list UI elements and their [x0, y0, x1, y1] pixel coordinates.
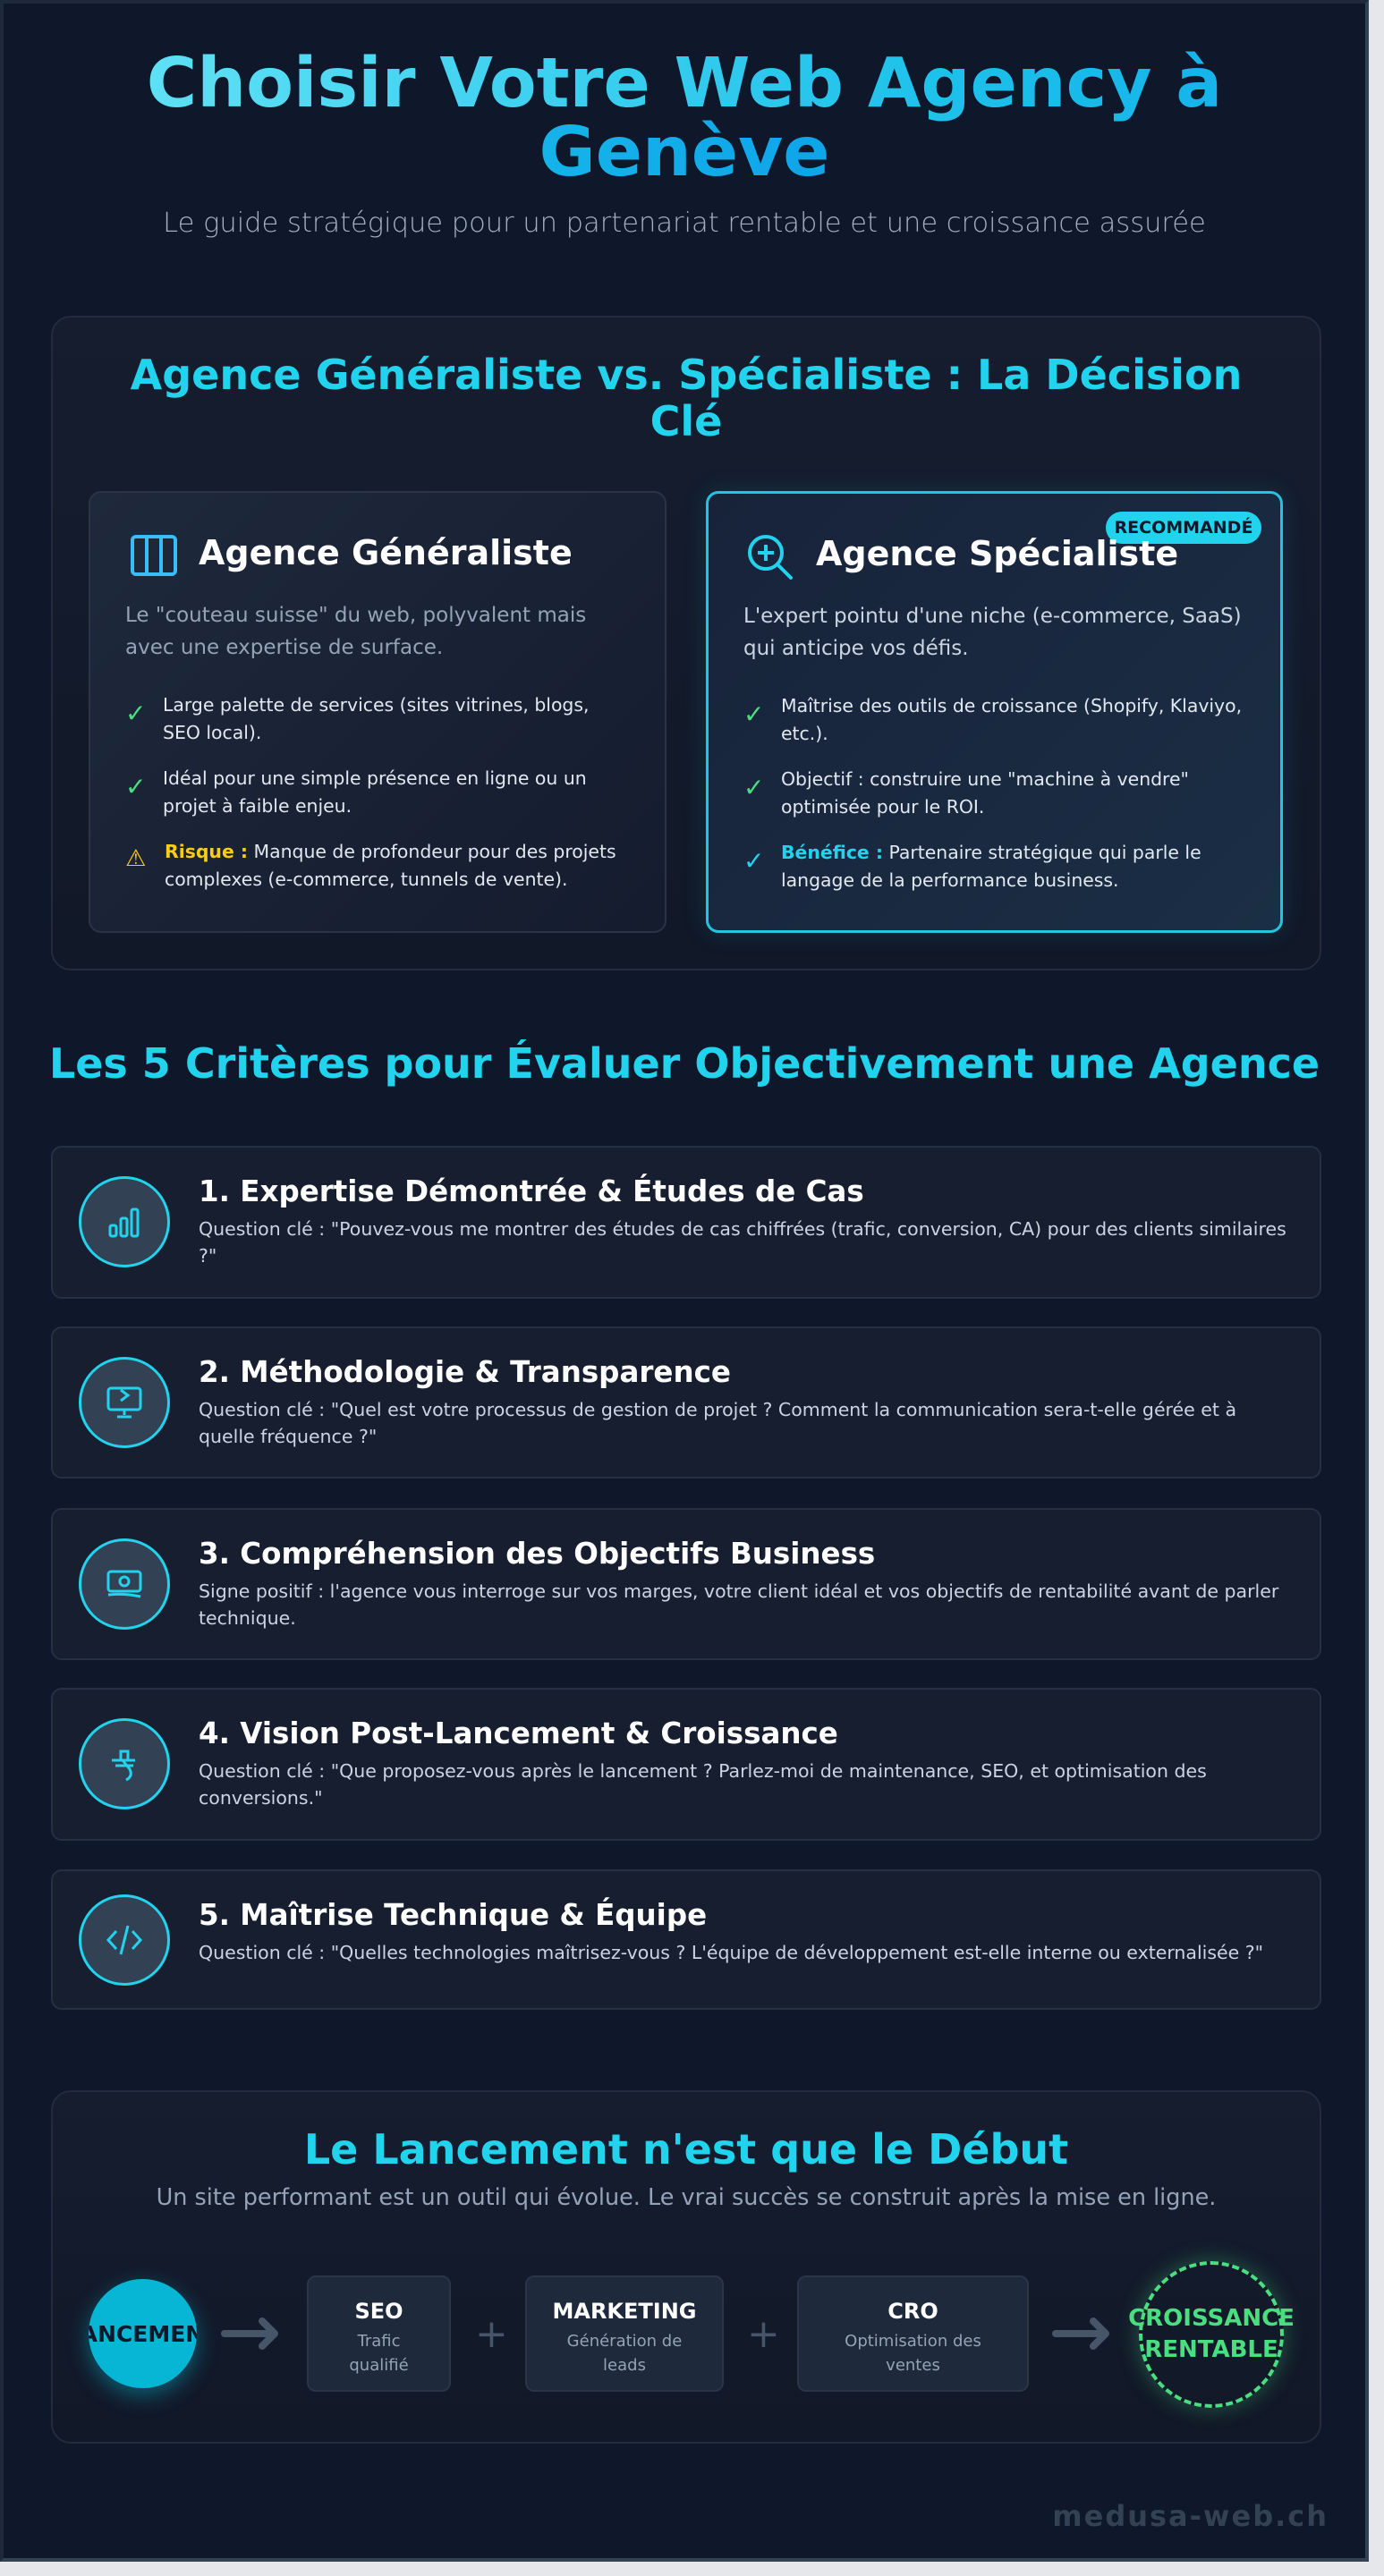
- panel heading: Agence Généraliste vs. Spécialiste : La Décision: [131, 351, 1242, 399]
- plus: +: [747, 2311, 780, 2357]
- icon: bar chart: [79, 1176, 170, 1267]
- circle: croissance rentable: CROISSANCE: [1128, 2305, 1295, 2332]
- criterion 2: Question clé : "Quel est votre processus de gestion de projet ? Comment la communication sera-t-elle gérée et à quelle fréquence ?": [199, 1399, 1236, 1447]
- icon: rocket: [79, 1718, 170, 1809]
- arrow: [1052, 2318, 1109, 2350]
- card: specialiste: [706, 491, 1283, 933]
- panel: generaliste vs specialiste: [51, 316, 1321, 970]
- list: generaliste: ✓: [125, 772, 146, 801]
- box: CRO: [797, 2275, 1029, 2392]
- criterion 1: Question clé : "Pouvez-vous me montrer des études de cas chiffrées (trafic, conversion, CA) pour des clients similaires ?": [199, 1218, 1286, 1267]
- criterion 4: [51, 1688, 1321, 1841]
- criterion 5: 5. Maîtrise Technique & Équipe: [199, 1898, 707, 1932]
- list: specialiste: Bénéfice : Partenaire stratégique qui parle le langage de la performance business.: [781, 842, 1201, 891]
- list: generaliste: ⚠: [125, 845, 146, 872]
- criterion 3: [51, 1508, 1321, 1660]
- criterion 4: Question clé : "Que proposez-vous après le lancement ? Parlez-moi de maintenance, SEO, et optimisation des conversions.": [199, 1760, 1207, 1809]
- icon: magnifier plus: [748, 535, 793, 580]
- circle: croissance rentable: RENTABLE: [1144, 2336, 1278, 2363]
- list: generaliste: Idéal pour une simple présence en ligne ou un projet à faible enjeu.: [163, 767, 587, 817]
- heading: lancement: Le Lancement n'est que le Début: [304, 2125, 1068, 2174]
- list: generaliste: ✓: [125, 699, 146, 728]
- panel heading: [131, 351, 1242, 445]
- list: specialiste: Objectif : construire une "machine à vendre" optimisée pour le ROI.: [781, 768, 1189, 818]
- icon: columns: [131, 535, 177, 576]
- circle: lancement: [89, 2279, 197, 2388]
- heading: generaliste: Agence Généraliste: [199, 533, 573, 572]
- box: CRO: CRO: [887, 2299, 938, 2324]
- box: SEO: [307, 2275, 451, 2392]
- criterion 2: [51, 1326, 1321, 1479]
- box: marketing: Génération de: [567, 2332, 682, 2351]
- icon: money: [79, 1538, 170, 1630]
- title: Genève: [539, 113, 829, 192]
- list: specialiste: ✓: [743, 699, 764, 729]
- criterion 3: Signe positif : l'agence vous interroge sur vos marges, votre client idéal et vos objectifs de rentabilité avant de parler technique.: [199, 1580, 1278, 1629]
- description: generaliste: Le "couteau suisse" du web, polyvalent mais avec une expertise de surface.: [125, 604, 586, 659]
- criterion 4: 4. Vision Post-Lancement & Croissance: [199, 1716, 838, 1750]
- criterion 2: 2. Méthodologie & Transparence: [199, 1355, 731, 1389]
- box: SEO: Trafic: [357, 2332, 401, 2351]
- box: marketing: MARKETING: [552, 2299, 696, 2324]
- criterion 3: 3. Compréhension des Objectifs Business: [199, 1537, 875, 1571]
- box: SEO: qualifié: [349, 2356, 409, 2375]
- card: generaliste: [89, 491, 667, 933]
- icon: code: [79, 1894, 170, 1986]
- footer brand: medusa-web.ch: [1052, 2499, 1329, 2533]
- list: generaliste: Risque : Manque de profondeur pour des projets complexes (e-commerce, tunnels de vente).: [165, 841, 616, 890]
- icon: monitor: [79, 1357, 170, 1448]
- panel heading: Clé: [650, 397, 722, 445]
- subtitle: lancement: Un site performant est un outil qui évolue. Le vrai succès se construit après la mise en ligne.: [157, 2184, 1216, 2211]
- circle: croissance rentable: [1139, 2261, 1284, 2408]
- box: CRO: Optimisation des: [845, 2332, 981, 2351]
- description: specialiste: L'expert pointu d'une niche (e-commerce, SaaS) qui anticipe vos défis.: [743, 605, 1242, 660]
- criterion 1: [51, 1146, 1321, 1299]
- criterion 1: 1. Expertise Démontrée & Études de Cas: [199, 1174, 864, 1208]
- list: generaliste: [125, 694, 616, 890]
- arrow: [221, 2318, 278, 2350]
- title: Choisir Votre Web Agency à: [147, 44, 1222, 123]
- box: CRO: ventes: [886, 2356, 940, 2375]
- subtitle: Le guide stratégique pour un partenariat rentable et une croissance assurée: [163, 208, 1206, 239]
- criterion 5: [51, 1869, 1321, 2010]
- box: marketing: leads: [603, 2356, 646, 2375]
- title: [147, 44, 1222, 192]
- badge: recommandé: RECOMMANDÉ: [1115, 518, 1252, 538]
- box: marketing: [525, 2275, 724, 2392]
- list: specialiste: [743, 695, 1242, 891]
- heading: specialiste: Agence Spécialiste: [816, 534, 1178, 573]
- criterion 5: Question clé : "Quelles technologies maîtrisez-vous ? L'équipe de développement est-elle interne ou externalisée ?": [199, 1942, 1263, 1963]
- box: SEO: SEO: [354, 2299, 403, 2324]
- list: specialiste: ✓: [743, 773, 764, 802]
- list: specialiste: Maîtrise des outils de croissance (Shopify, Klaviyo, etc.).: [781, 695, 1242, 744]
- panel: lancement: [51, 2090, 1321, 2444]
- badge: recommandé: [1106, 512, 1261, 544]
- list: specialiste: ✓: [743, 846, 764, 876]
- plus: +: [475, 2311, 508, 2357]
- section heading: 5 critères: Les 5 Critères pour Évaluer Objectivement une Agence: [49, 1039, 1320, 1088]
- list: generaliste: Large palette de services (sites vitrines, blogs, SEO local).: [163, 694, 589, 743]
